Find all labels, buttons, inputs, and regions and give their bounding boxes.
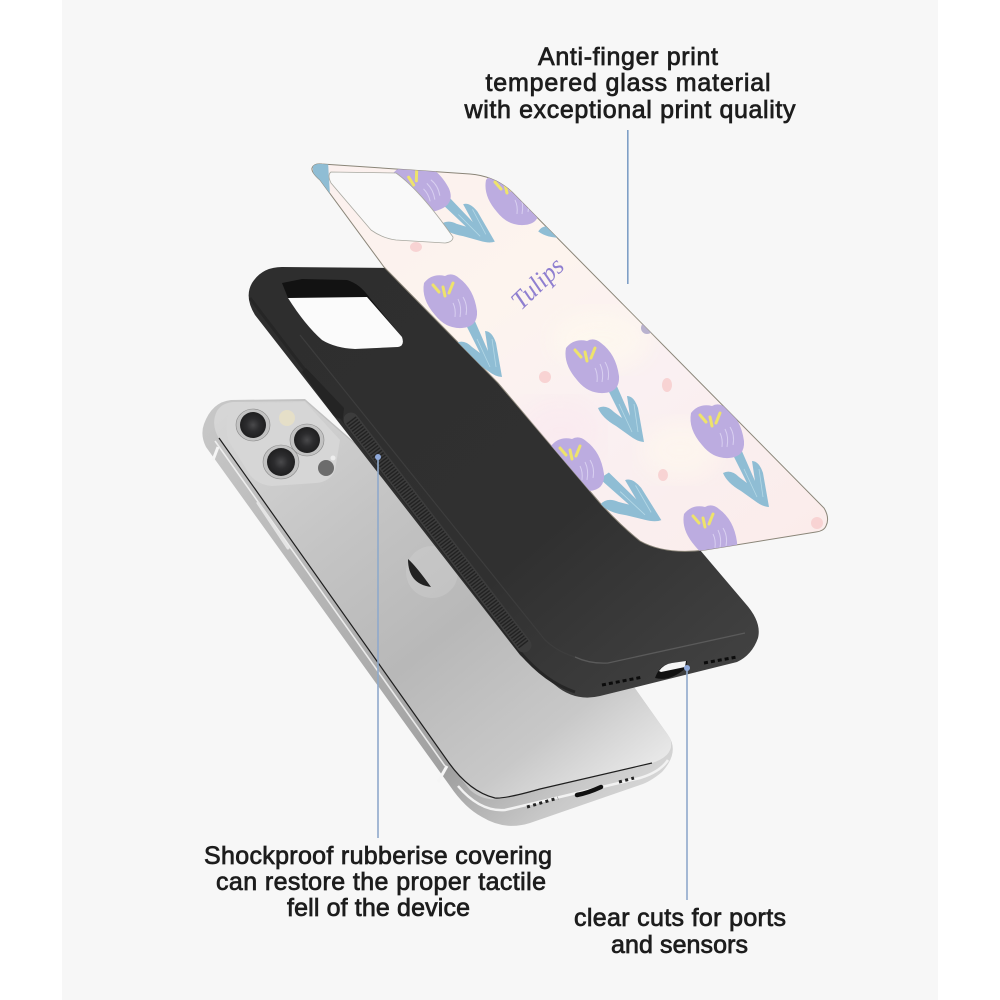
callout: tempered glass: Anti-finger print — [538, 43, 718, 71]
silver phone — [202, 399, 673, 826]
leader line and dot: rubber covering — [375, 454, 381, 838]
printed glass back — [311, 163, 828, 552]
camera module — [226, 402, 340, 486]
glass plate — [312, 164, 828, 551]
callout: shockproof: fell of the device — [287, 894, 470, 922]
callout: cuts: clear cuts for ports — [574, 904, 786, 932]
phone back — [214, 401, 671, 799]
callout: shockproof — [204, 842, 552, 922]
apple logo — [406, 546, 458, 598]
camera cutout — [282, 279, 403, 349]
phone bottom ports — [527, 778, 634, 807]
case body — [249, 267, 759, 698]
hearts — [410, 242, 823, 529]
leader line and dot: ports — [684, 665, 690, 900]
grip strip — [351, 420, 524, 645]
black rubber case — [249, 267, 759, 698]
callout: tempered glass: tempered glass material — [486, 69, 770, 97]
callout: tempered glass — [464, 43, 796, 124]
phone frame — [202, 399, 673, 826]
glass camera hole — [329, 172, 453, 243]
leader line: glass — [627, 130, 629, 284]
callout: tempered glass: with exceptional print quality — [464, 96, 796, 124]
camera lenses — [236, 409, 336, 479]
charging port cutout — [655, 661, 687, 679]
callout: cuts: and sensors — [611, 931, 748, 959]
callout: shockproof: can restore the proper tactile — [216, 868, 546, 896]
callout: cuts — [574, 904, 786, 959]
tulip pattern — [312, 164, 823, 550]
callout: shockproof: Shockproof rubberise covering — [204, 842, 552, 870]
word: Tulips: Tulips — [505, 251, 570, 315]
side button — [302, 368, 344, 419]
case speaker holes — [602, 657, 737, 685]
